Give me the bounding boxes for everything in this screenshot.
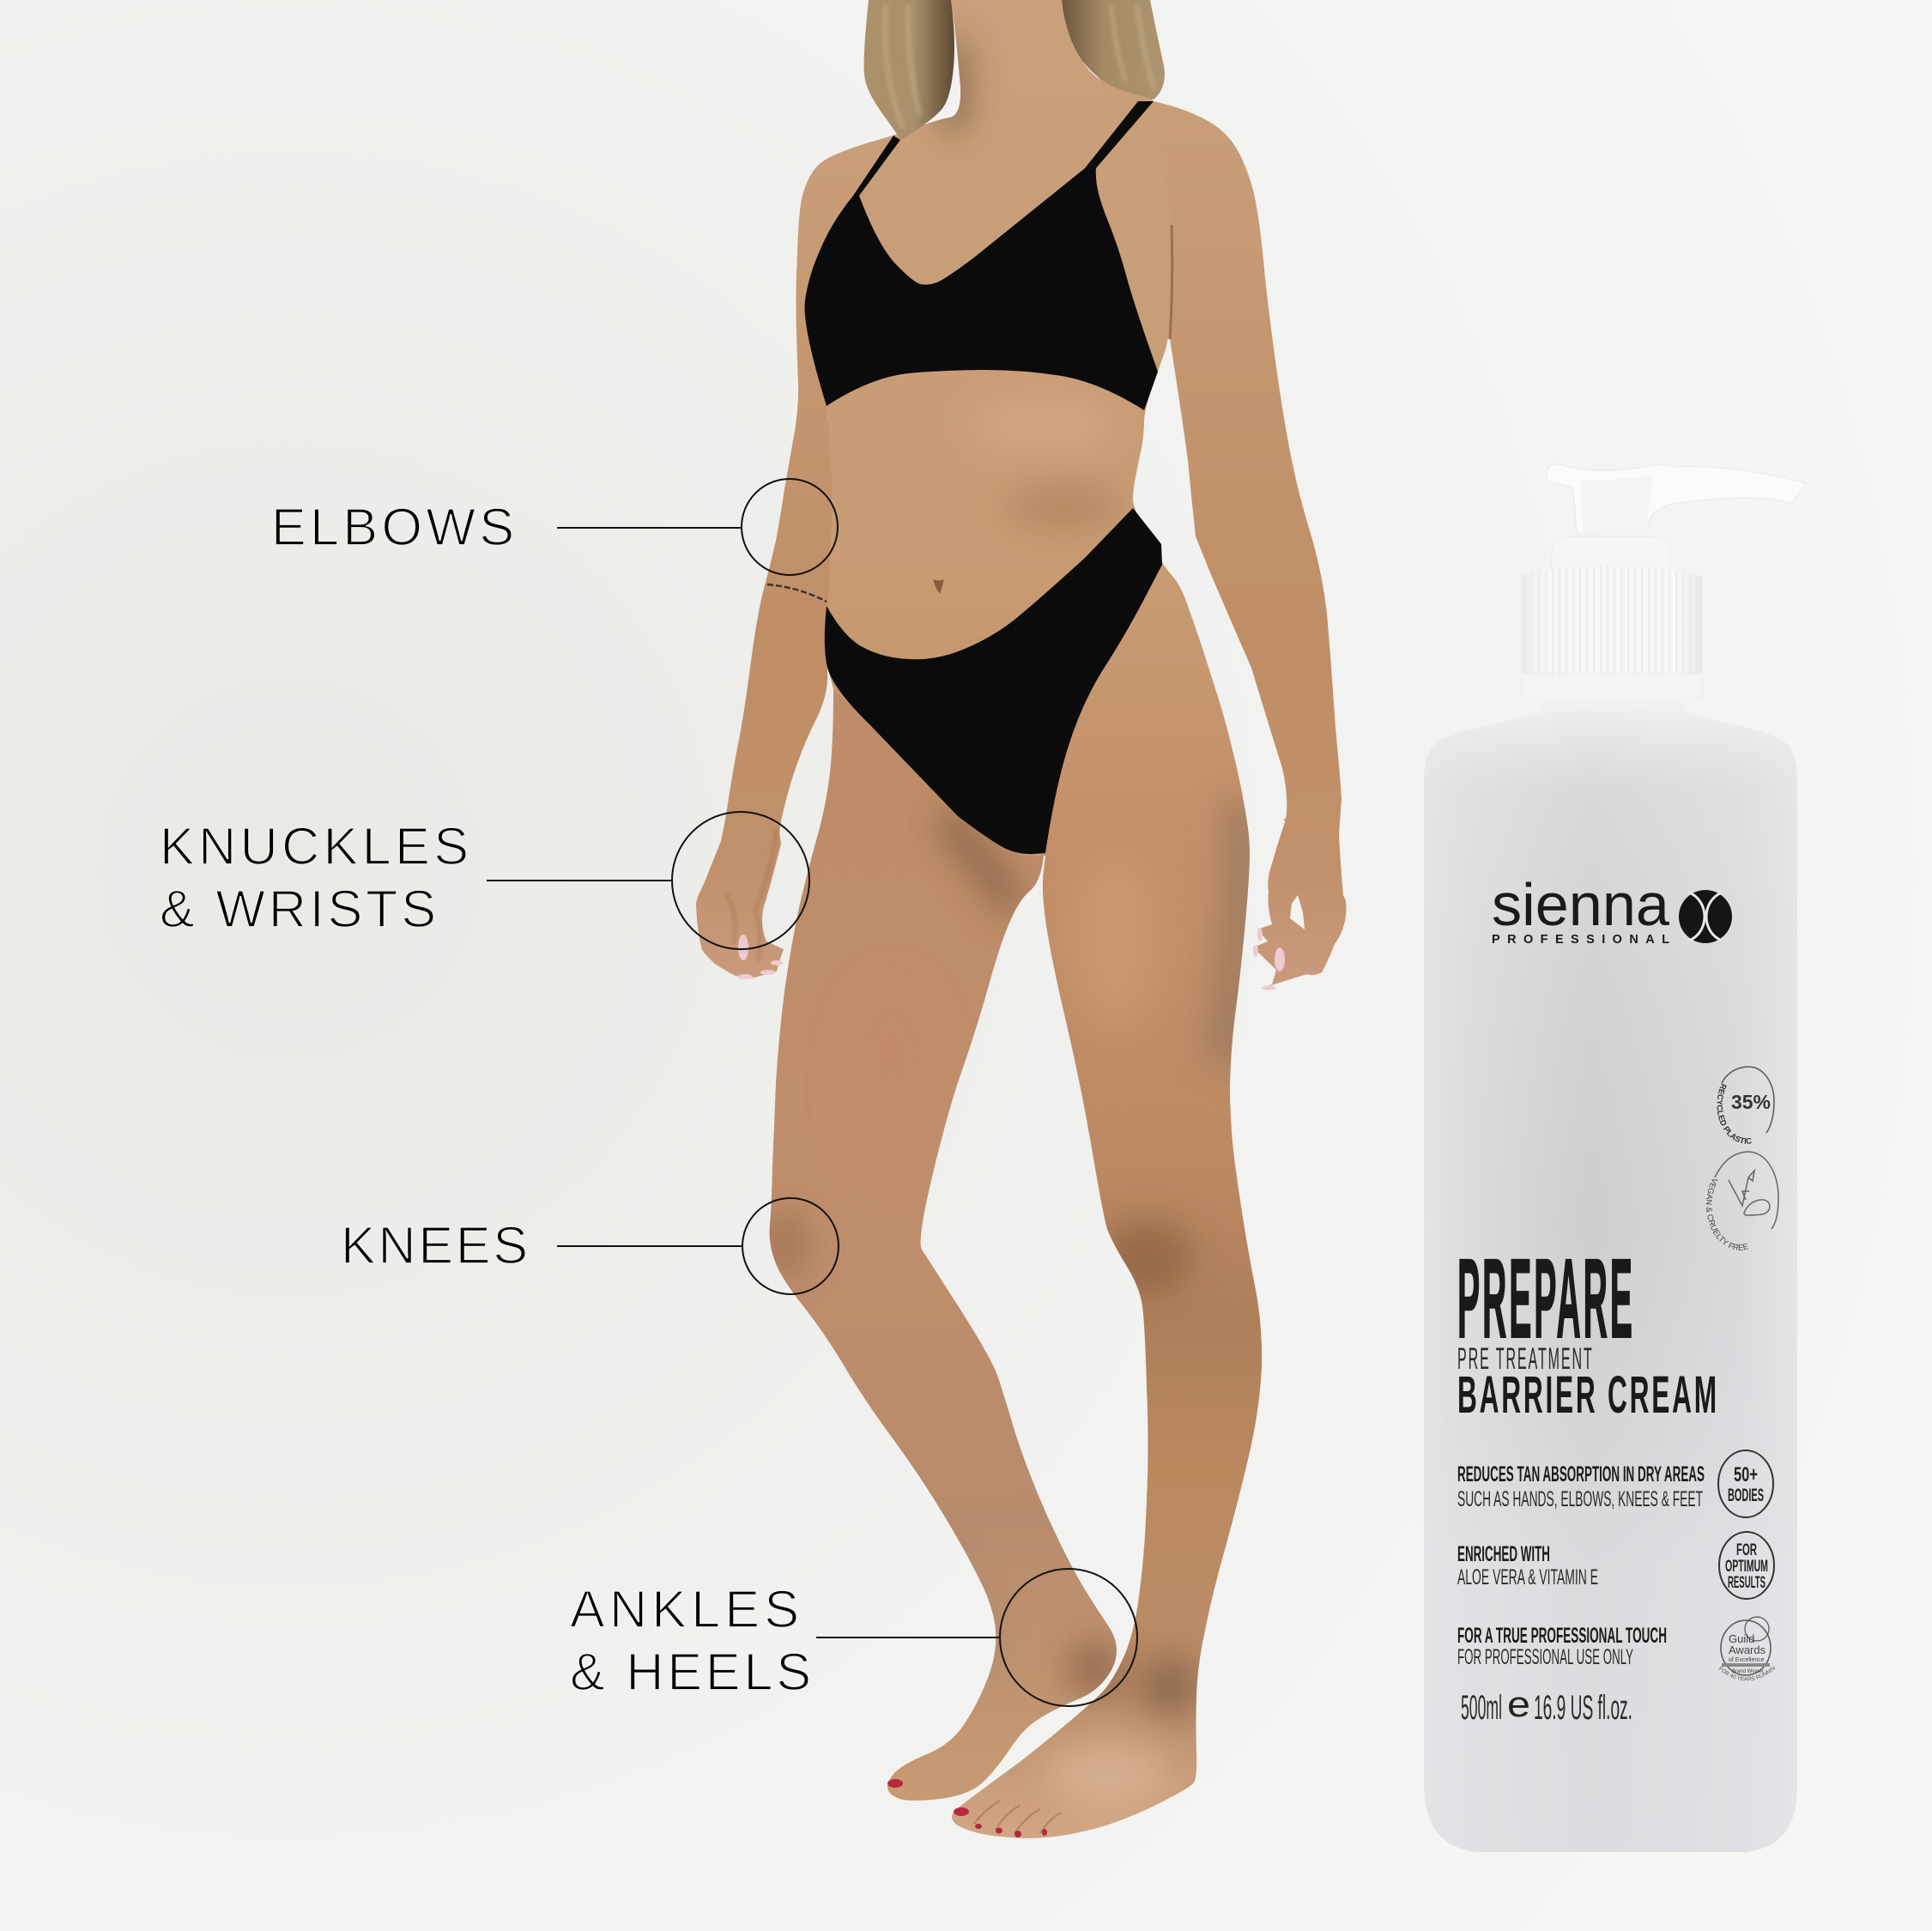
badge: 50+ bodies: 50+ bbox=[1734, 1463, 1758, 1486]
badge: recycled plastic: 35% bbox=[1731, 1091, 1771, 1113]
volume bbox=[1461, 1684, 1632, 1727]
torso and straight right leg bbox=[796, 0, 1262, 1838]
bent left leg bbox=[770, 689, 1117, 1801]
badge: recycled plastic: RECYCLED PLASTIC bbox=[1717, 1083, 1752, 1144]
benefit list: FOR A TRUE PROFESSIONAL TOUCH bbox=[1457, 1624, 1667, 1648]
volume: e bbox=[1507, 1684, 1530, 1724]
badge: for optimum results: OPTIMUM bbox=[1725, 1558, 1768, 1576]
callout: knuckles and wrists: & WRISTS bbox=[160, 880, 436, 938]
product title: PRE TREATMENT bbox=[1457, 1341, 1592, 1376]
bottle highlight bbox=[1424, 711, 1797, 1852]
badge: for optimum results: RESULTS bbox=[1728, 1574, 1765, 1592]
fingernails bbox=[737, 928, 1285, 990]
callout: knees: KNEES bbox=[341, 1216, 528, 1274]
body shading bbox=[761, 34, 1243, 1805]
armpit crease bbox=[1170, 225, 1172, 339]
callout: knuckles and wrists bbox=[160, 812, 809, 949]
product title: BARRIER CREAM bbox=[1457, 1366, 1717, 1425]
brand logo: sienna bbox=[1492, 871, 1669, 938]
badge: vegan and cruelty free bbox=[1706, 1151, 1779, 1250]
product title bbox=[1457, 1236, 1717, 1425]
callout: knees bbox=[341, 1198, 839, 1294]
badge: guild awards: Guild bbox=[1729, 1632, 1754, 1645]
shoulder skin under hair and arm bbox=[1069, 34, 1178, 339]
tattoo bbox=[767, 584, 827, 602]
left hand creases bbox=[725, 828, 777, 961]
toenails bbox=[887, 1779, 1047, 1837]
toes bbox=[974, 1801, 1061, 1833]
bottle body bbox=[1424, 711, 1797, 1852]
pump collar bbox=[1552, 536, 1670, 573]
cap skirt bbox=[1522, 674, 1702, 699]
callout: ankles and heels: & HEELS bbox=[570, 1643, 811, 1701]
right hand gap bbox=[1290, 895, 1305, 929]
benefit list bbox=[1457, 1462, 1705, 1669]
navel bbox=[933, 579, 944, 594]
right arm and hand bbox=[1154, 101, 1347, 988]
badge: for optimum results: FOR bbox=[1736, 1541, 1757, 1559]
product: pump bottle: 16.9 US fl.oz. bbox=[1534, 1689, 1632, 1727]
badge: guild awards: Brand Winner bbox=[1732, 1669, 1764, 1674]
bikini bottom bbox=[825, 508, 1162, 854]
pump head bbox=[1547, 464, 1807, 534]
product title: PREPARE bbox=[1457, 1236, 1632, 1361]
callout: elbows: ELBOWS bbox=[271, 498, 514, 556]
badge: guild awards: FOR 40 YEARS RUNNING bbox=[1718, 1666, 1775, 1680]
badge: guild awards: Awards bbox=[1729, 1643, 1766, 1656]
callout: knuckles and wrists: KNUCKLES bbox=[160, 817, 469, 875]
photo: standing model bbox=[696, 0, 1347, 1838]
badge: vegan and cruelty free: VEGAN & CRUELTY FREE bbox=[1706, 1179, 1749, 1250]
badge: recycled plastic bbox=[1717, 1066, 1775, 1144]
benefit list: ALOE VERA & VITAMIN E bbox=[1457, 1565, 1598, 1589]
benefit list: FOR PROFESSIONAL USE ONLY bbox=[1457, 1645, 1633, 1669]
brand logo bbox=[1492, 871, 1732, 947]
left arm and hand bbox=[696, 136, 893, 978]
callout: ankles and heels bbox=[570, 1569, 1137, 1706]
pump stem shade bbox=[1581, 475, 1652, 534]
benefit list: REDUCES TAN ABSORPTION IN DRY AREAS bbox=[1457, 1462, 1705, 1486]
badge: 50+ bodies: BODIES bbox=[1728, 1486, 1764, 1505]
bikini top bbox=[805, 101, 1158, 410]
badge: 50+ bodies bbox=[1718, 1450, 1773, 1517]
brand logo: PROFESSIONAL bbox=[1492, 933, 1669, 947]
benefit list: SUCH AS HANDS, ELBOWS, KNEES & FEET bbox=[1457, 1487, 1703, 1511]
bracelet bbox=[1284, 820, 1339, 833]
callout: ankles and heels: ANKLES bbox=[570, 1580, 799, 1638]
badge: for optimum results bbox=[1719, 1532, 1774, 1599]
benefit list: ENRICHED WITH bbox=[1457, 1542, 1550, 1566]
hair bbox=[864, 0, 1165, 140]
bottle neck bbox=[1539, 698, 1687, 718]
badge: guild awards: of Excellence bbox=[1729, 1657, 1765, 1663]
volume: 500ml bbox=[1461, 1689, 1502, 1727]
ribbed cap bbox=[1522, 566, 1702, 674]
callout: elbows bbox=[271, 479, 838, 575]
